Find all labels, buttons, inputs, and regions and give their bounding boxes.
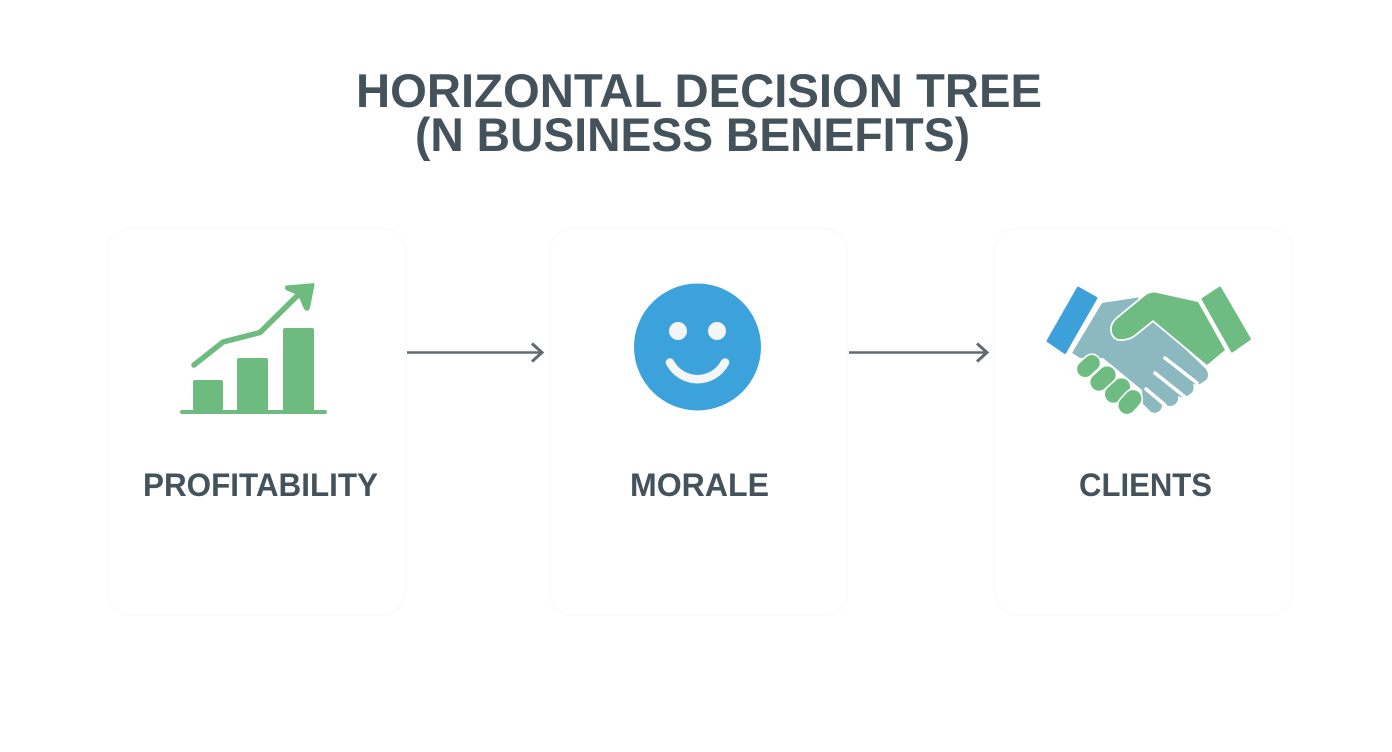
label: profitability: PROFITABILITY — [143, 467, 378, 503]
finger gaps — [1146, 358, 1197, 405]
card: profitability — [108, 228, 406, 616]
panel: morale — [550, 228, 848, 616]
label: morale: MORALE — [630, 467, 769, 503]
title — [356, 64, 1042, 161]
card: clients — [994, 228, 1292, 616]
icon: rising bar chart with arrow — [180, 283, 327, 414]
title: HORIZONTAL DECISION TREE — [356, 64, 1042, 117]
arrow: morale to clients — [849, 344, 987, 362]
arrow: profitability to morale — [407, 344, 542, 362]
panel: clients — [994, 228, 1292, 616]
card: morale — [550, 228, 848, 616]
icon: smiley face — [634, 284, 761, 410]
icon: handshake — [1048, 288, 1250, 417]
label: clients: CLIENTS — [1079, 467, 1212, 503]
title: (N BUSINESS BENEFITS) — [415, 108, 970, 161]
panel: profitability — [108, 228, 406, 616]
